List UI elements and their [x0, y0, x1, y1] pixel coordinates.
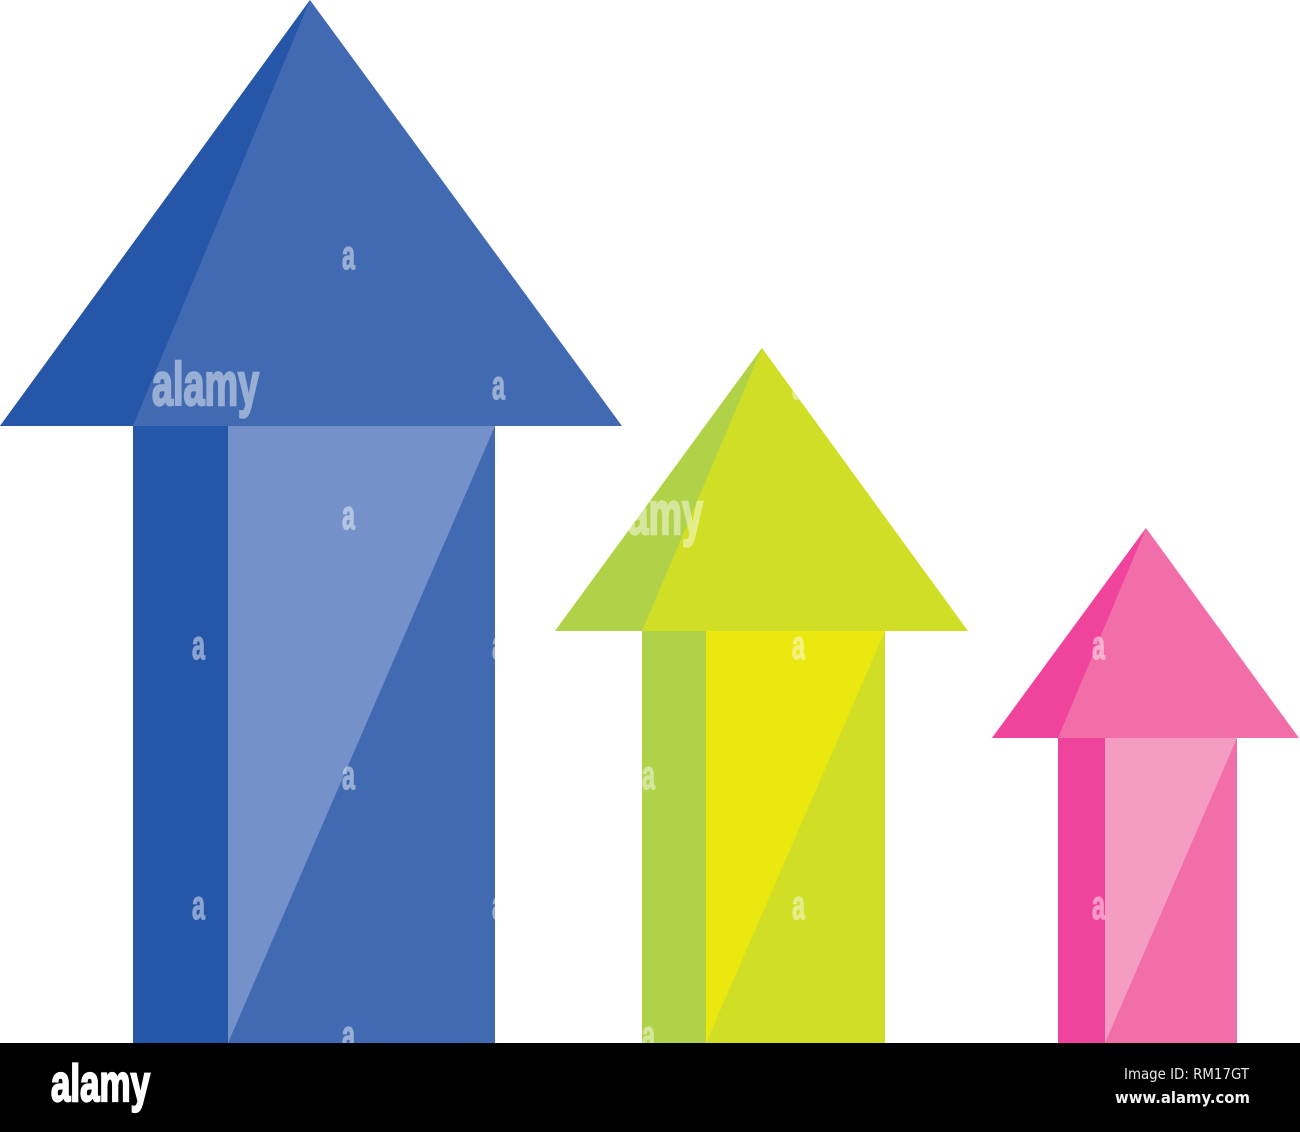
watermark: alamy repeated over arrows: a: [792, 362, 806, 408]
footer logo: alamy: alamy: [51, 1055, 150, 1113]
watermark: alamy repeated over arrows: a: [192, 622, 206, 668]
watermark: alamy repeated over arrows: a: [192, 882, 206, 928]
watermark: alamy repeated over arrows: [152, 232, 1106, 1058]
watermark: alamy repeated over arrows: alamy: [152, 351, 259, 418]
watermark: alamy repeated over arrows: a: [792, 882, 806, 928]
watermark: alamy repeated over arrows: a: [342, 1012, 356, 1058]
watermark: alamy repeated over arrows: a: [642, 752, 656, 798]
watermark: alamy repeated over arrows: a: [342, 232, 356, 278]
watermark: alamy repeated over arrows: a: [492, 882, 506, 928]
watermark: alamy repeated over arrows: a: [492, 622, 506, 668]
watermark: alamy repeated over arrows: a: [342, 492, 356, 538]
footer image id: Image ID: RM17GT: [1124, 1065, 1250, 1083]
watermark: alamy repeated over arrows: alamy: [596, 480, 703, 547]
watermark: alamy repeated over arrows: a: [492, 362, 506, 408]
watermark: alamy repeated over arrows: a: [342, 752, 356, 798]
watermark: alamy repeated over arrows: a: [1092, 622, 1106, 668]
arrow: medium green: [555, 348, 968, 1043]
footer website: www.alamy.com: [1115, 1088, 1250, 1107]
watermark: alamy repeated over arrows: a: [792, 622, 806, 668]
arrow: large blue: [0, 0, 622, 1043]
watermark: alamy repeated over arrows: a: [1092, 882, 1106, 928]
watermark: alamy repeated over arrows: a: [642, 1012, 656, 1058]
arrow: small pink: [992, 528, 1299, 1043]
footer bar: [0, 1043, 1300, 1132]
